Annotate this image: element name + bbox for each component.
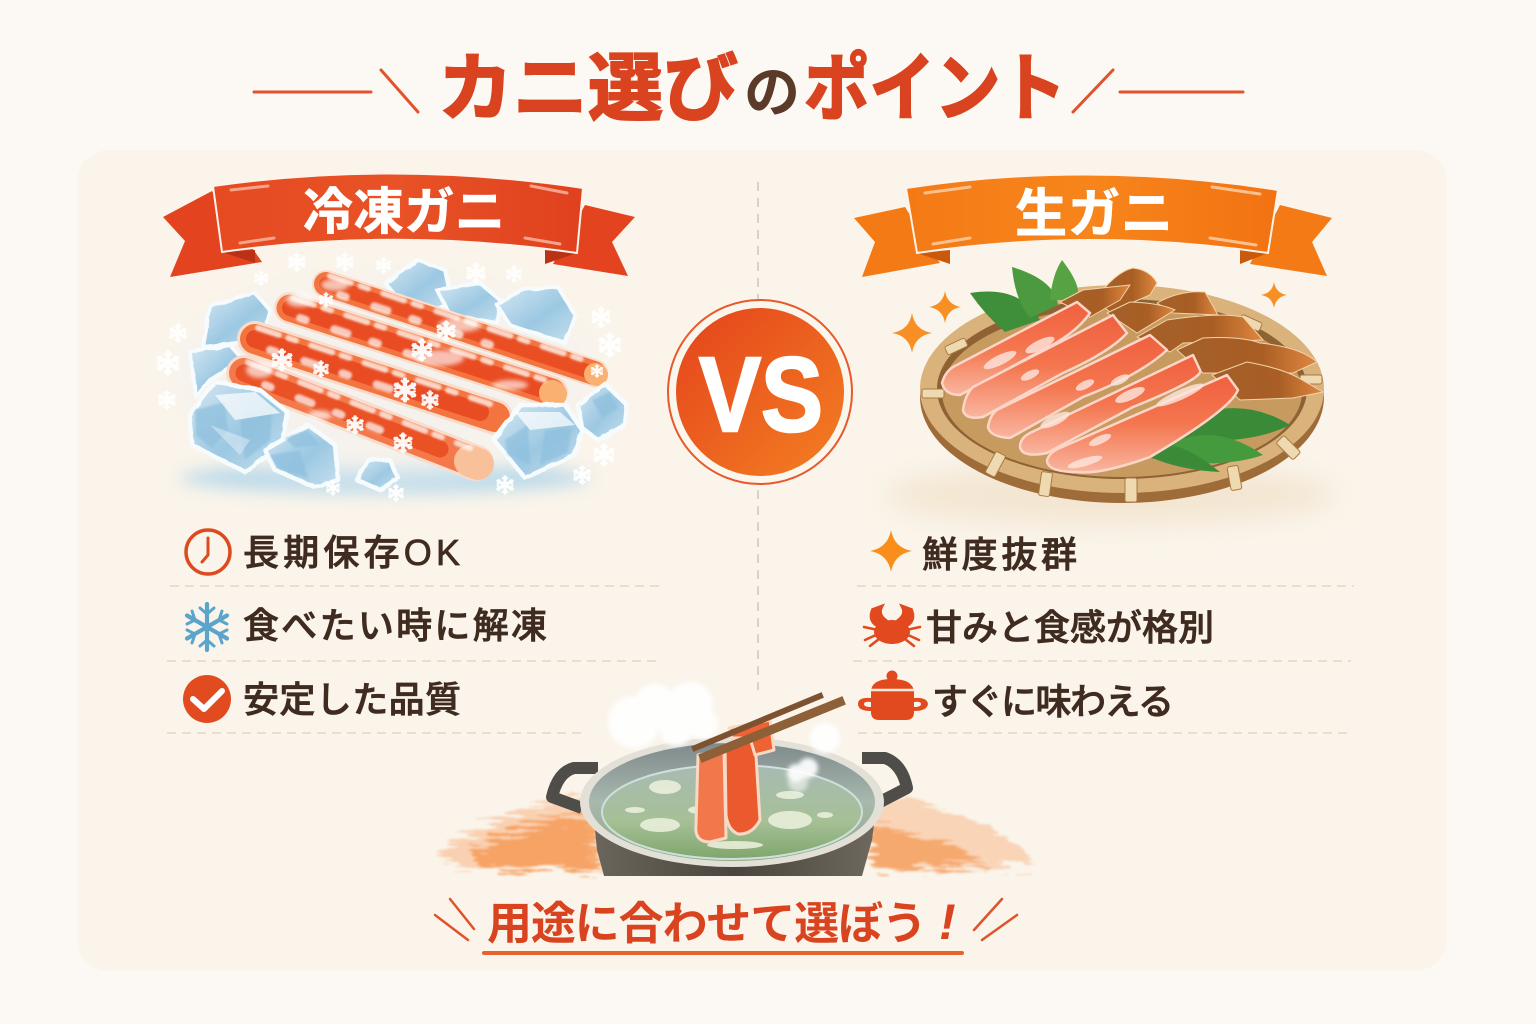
icon: snowflake: [187, 604, 227, 650]
icon: pot: [858, 670, 928, 720]
icon: check mark: [183, 675, 231, 723]
illustration: fresh crab on bamboo tray: [885, 260, 1335, 523]
illustration: shabu-shabu pot: [440, 682, 1030, 876]
centre divider: [757, 182, 759, 690]
list: frozen crab benefits: [167, 530, 662, 733]
text: enjoy immediately: すぐに味わえる: [932, 681, 1174, 722]
badge: VS: [668, 300, 852, 484]
panel: frozen crab: [158, 173, 662, 733]
ribbon: frozen crab heading: [163, 173, 635, 277]
panel: comparison background: [77, 150, 1447, 971]
text: sweetness and texture: 甘みと食感が格別: [926, 607, 1214, 648]
bamboo tray: [920, 285, 1324, 503]
panel: fresh crab: [853, 174, 1354, 733]
pot handles: [552, 758, 907, 808]
icon: sparkle: [870, 530, 912, 572]
text: thaw when needed: 食べたい時に解凍: [243, 605, 547, 646]
text: outstanding freshness: 鮮度抜群: [922, 534, 1077, 575]
title: の: [744, 61, 800, 124]
icon: crab: [864, 607, 920, 646]
ribbon: fresh crab heading: [854, 174, 1332, 277]
pot rim and water: [580, 737, 884, 867]
list: fresh crab benefits: [853, 530, 1354, 733]
callout: choose by use: !: [939, 894, 956, 950]
crab meat: [942, 302, 1238, 472]
crab strips: [696, 720, 774, 842]
orange brush strokes: [440, 795, 1030, 870]
leaves: [970, 260, 1290, 472]
title accent lines: [254, 70, 1243, 112]
chopsticks: [695, 696, 840, 757]
steam: [608, 682, 840, 792]
crab claw shells: [1060, 268, 1323, 400]
illustration: frozen crab sticks on ice: [158, 254, 627, 500]
pot body: [593, 810, 876, 876]
callout: choose by use: [435, 894, 1017, 953]
ribbon: frozen crab heading: 冷凍ガニ: [303, 184, 505, 240]
title: [438, 47, 1066, 130]
ribbon: fresh crab heading: 生ガニ: [1015, 186, 1173, 244]
sparkles: [892, 282, 1287, 353]
text: stable quality: 安定した品質: [243, 679, 461, 720]
callout: choose by use: 用途に合わせて選ぼう: [487, 898, 927, 949]
title: ポイント: [804, 47, 1066, 130]
icon: clock: [186, 530, 230, 574]
badge: VS: VS: [699, 336, 823, 454]
text: long-term storage: 長期保存OK: [243, 532, 460, 573]
title: カニ選び: [438, 47, 738, 130]
